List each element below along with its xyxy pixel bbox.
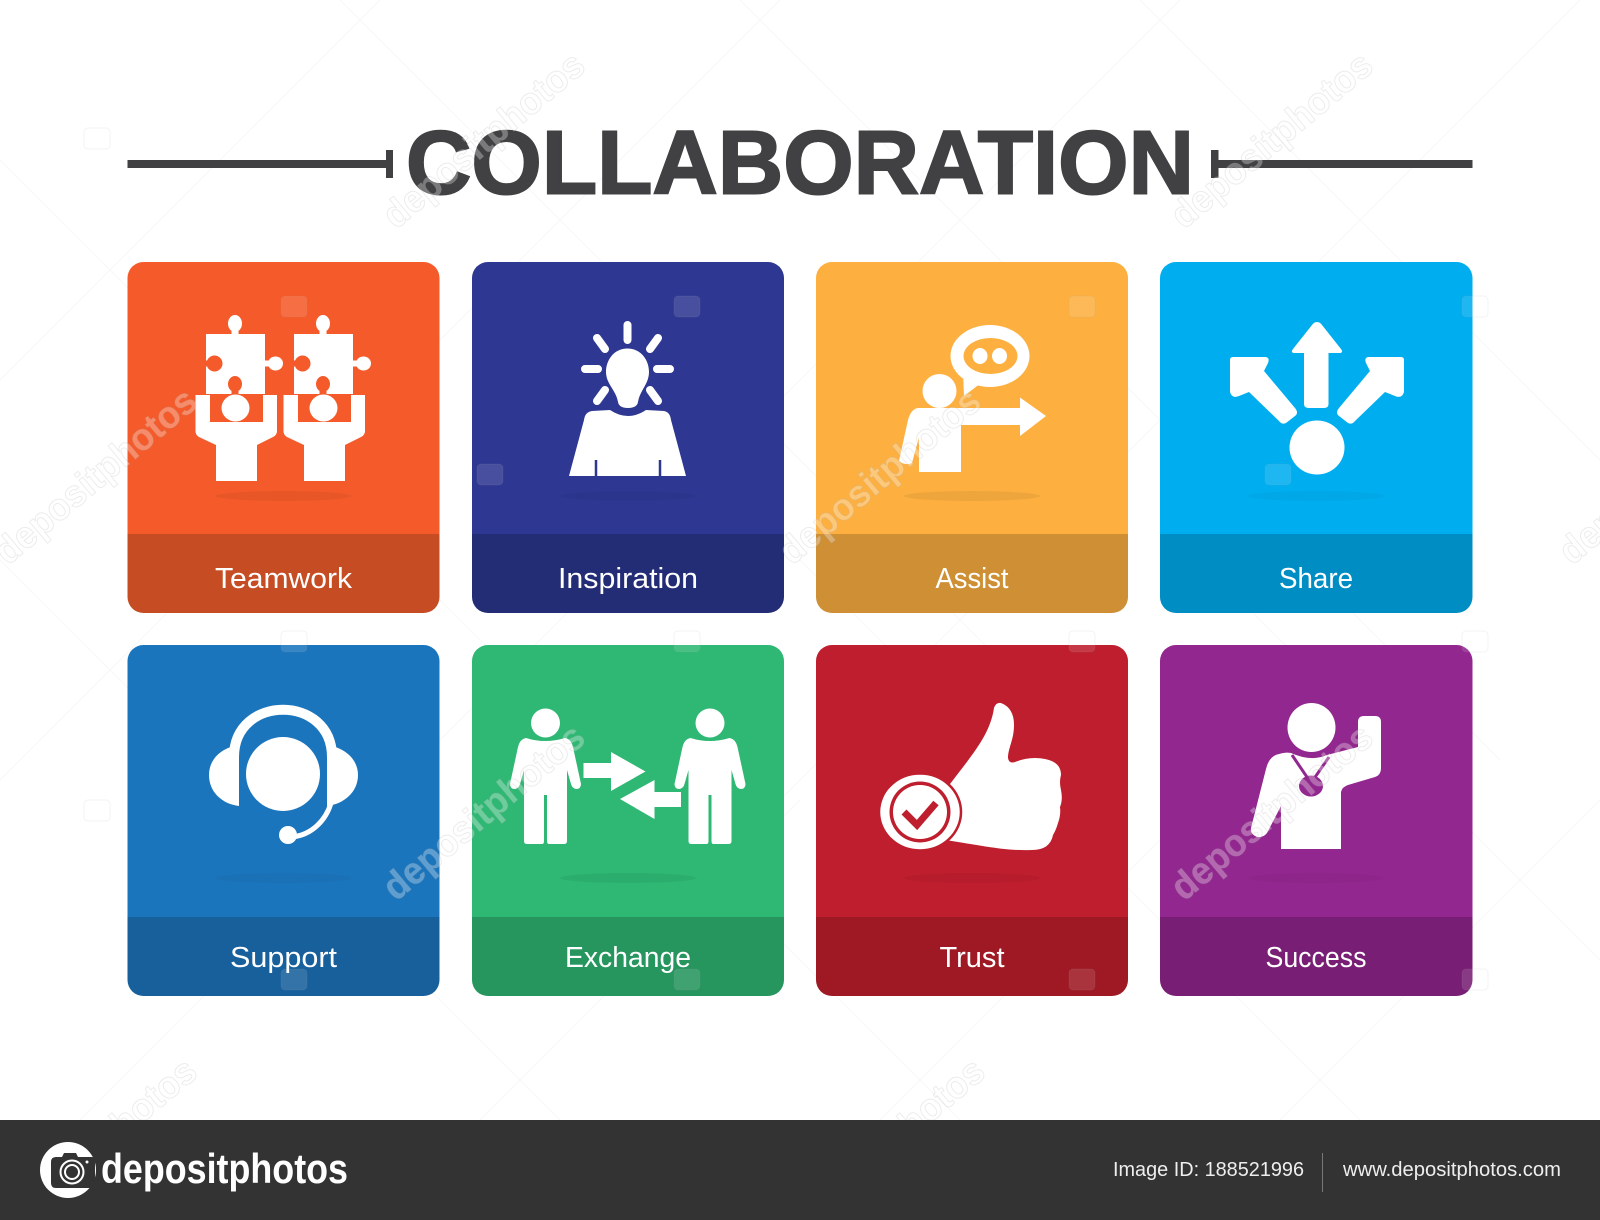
icon: person with medal	[1251, 703, 1381, 849]
icon: thumbs up with check badge	[879, 703, 1062, 850]
watermark: depositphotos	[375, 716, 593, 909]
panel: success	[1160, 645, 1472, 996]
icon: headset	[209, 710, 358, 844]
icon: teamwork puzzle people	[196, 315, 371, 481]
panel: assist	[816, 262, 1128, 613]
title: COLLABORATION	[406, 114, 1194, 214]
icon: three arrows from a node	[1230, 322, 1404, 474]
icon: person with speech bubble and arrow	[899, 325, 1046, 472]
panel: teamwork	[128, 262, 440, 613]
title rule left	[128, 150, 393, 178]
image id: Image ID: 188521996	[1113, 1159, 1304, 1181]
label: assist: Assist	[936, 563, 1008, 595]
label: trust: Trust	[940, 942, 1004, 974]
panel: exchange	[472, 645, 784, 996]
label: success: Success	[1266, 942, 1366, 974]
panel: share	[1160, 262, 1472, 613]
watermark: depositphotos	[771, 380, 989, 573]
label: teamwork: Teamwork	[215, 563, 353, 595]
panel: support	[128, 645, 440, 996]
label: inspiration: Inspiration	[558, 563, 698, 595]
icon: two people exchanging arrows	[510, 708, 746, 844]
footer bar	[0, 1120, 1600, 1220]
panel: trust	[816, 645, 1128, 996]
label: exchange: Exchange	[565, 942, 691, 974]
watermark: depositphotos	[1163, 716, 1381, 909]
watermark: depositphotos	[375, 44, 593, 237]
title rule right	[1211, 150, 1472, 178]
icon: lightbulb head	[569, 325, 686, 476]
label: support: Support	[230, 942, 337, 974]
icon: camera logo	[40, 1142, 96, 1198]
website: www.depositphotos.com	[1342, 1159, 1561, 1181]
logo wordmark: depositphotos	[101, 1145, 348, 1192]
watermark: depositphotos	[1163, 44, 1381, 237]
label: share: Share	[1279, 563, 1353, 595]
panel: inspiration	[472, 262, 784, 613]
